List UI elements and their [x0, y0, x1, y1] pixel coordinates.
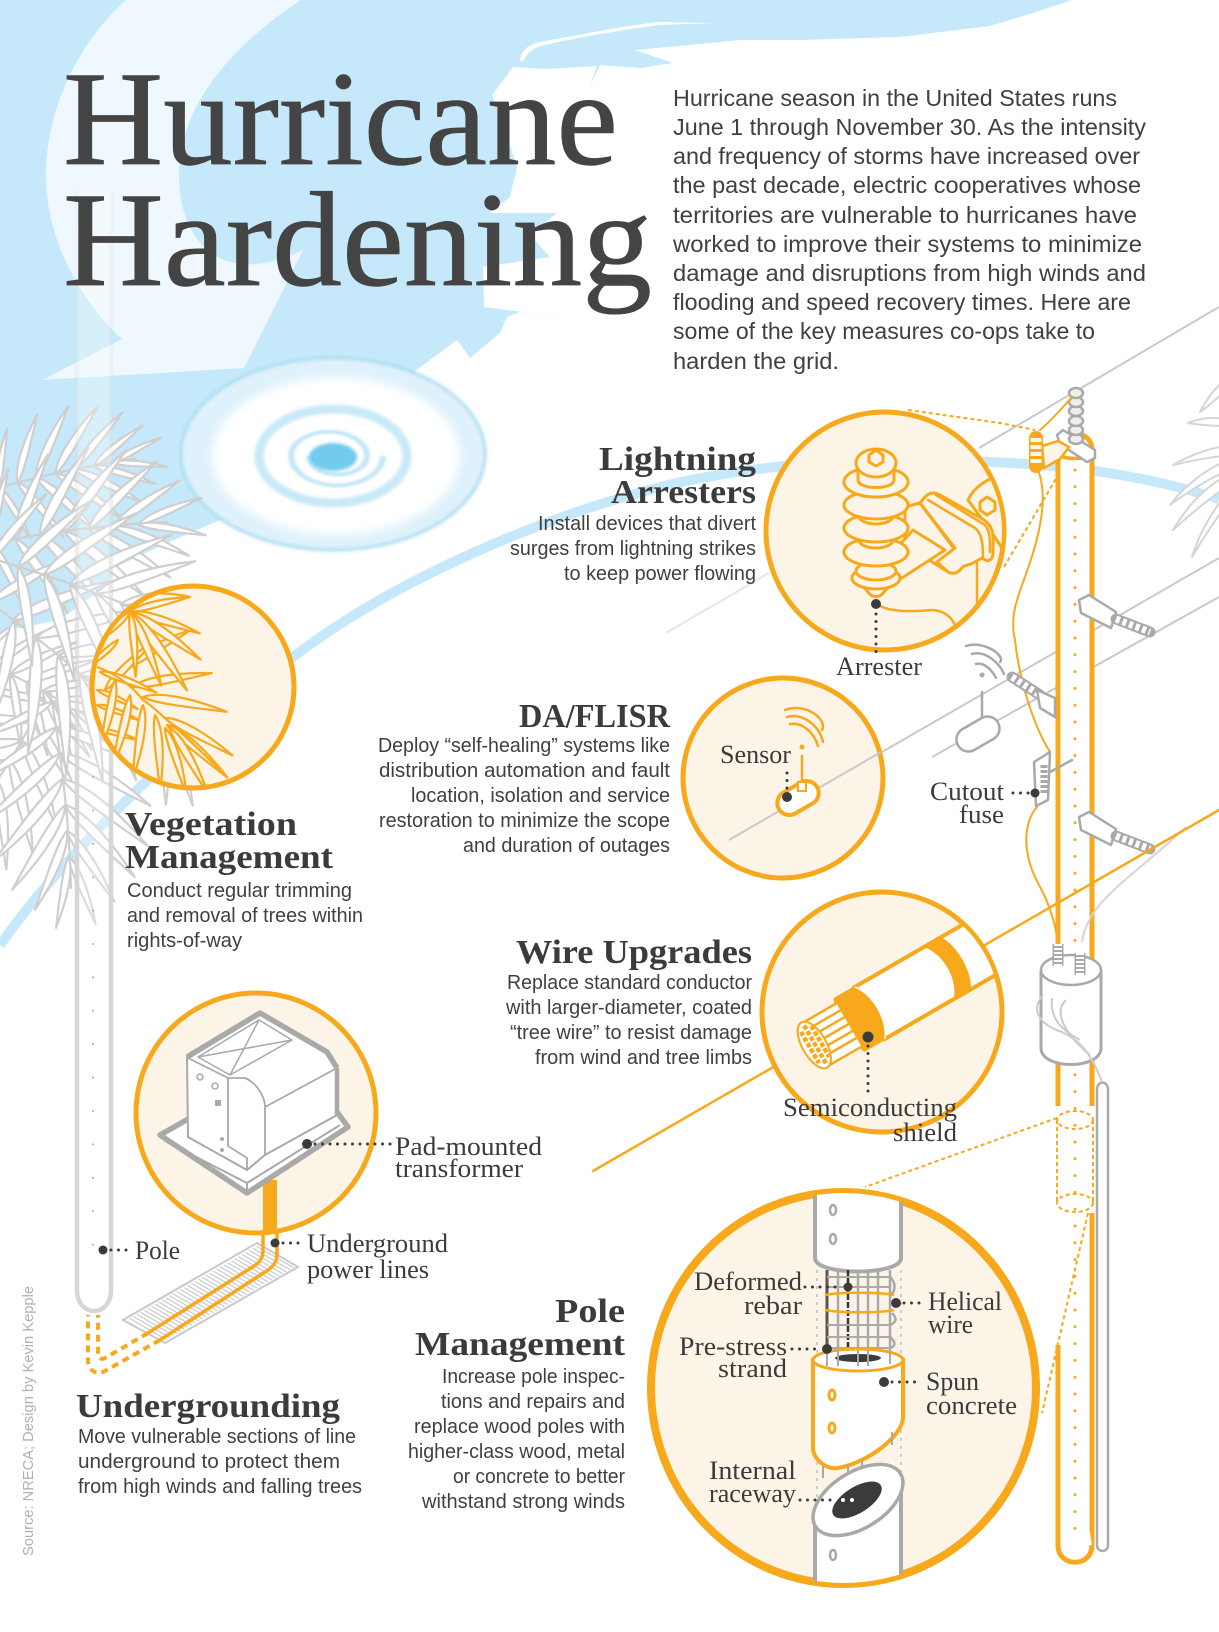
grey line sensor [952, 645, 1004, 756]
heading: Management [415, 1326, 626, 1363]
label: arrester: Arrester [836, 652, 922, 681]
intro text block: worked to improve their systems to minimize [672, 231, 1142, 257]
body text [78, 1425, 362, 1498]
background: blue map of the ocean and coastline [0, 0, 1072, 632]
label: pole: Pole [135, 1236, 180, 1265]
label: semiconducting shield: shield [893, 1118, 957, 1147]
heading [415, 1293, 626, 1363]
capacitor bank [1037, 827, 1186, 1082]
label: deformed rebar: rebar [744, 1291, 802, 1320]
grey ground wire [1097, 1082, 1108, 1551]
label: underground power lines [270, 1229, 448, 1284]
underground conduit [88, 1180, 277, 1373]
body text: surges from lightning strikes [510, 537, 756, 560]
body text: or concrete to better [453, 1465, 625, 1488]
heading: Management [125, 839, 334, 876]
circle [136, 993, 376, 1233]
body text: Replace standard conductor [507, 971, 752, 994]
circle [762, 892, 1002, 1132]
cutout fuse [1034, 752, 1072, 806]
label: underground power lines: Underground [307, 1229, 448, 1258]
label: pole [98, 1236, 180, 1265]
label: semiconducting shield [783, 1032, 957, 1147]
body text: withstand strong winds [421, 1490, 625, 1513]
intro text block: and frequency of storms have increased over [673, 143, 1140, 169]
intro text block: harden the grid. [673, 348, 839, 374]
transformer illustration [160, 1013, 348, 1193]
body text: rights-of-way [127, 929, 243, 952]
body text: Conduct regular trimming [127, 879, 352, 902]
label: deformed rebar [694, 1267, 852, 1320]
label: internal raceway: Internal [709, 1456, 796, 1485]
body text [378, 734, 670, 857]
body text [127, 879, 363, 952]
label: spun concrete: concrete [926, 1391, 1017, 1420]
grey power lines [666, 307, 1219, 840]
label: internal raceway [709, 1456, 854, 1508]
intro text block [672, 85, 1146, 374]
label: internal raceway: raceway [709, 1479, 796, 1508]
body text: tions and repairs and [441, 1390, 625, 1413]
arrester illustration [844, 449, 1010, 625]
label: helical wire: Helical [928, 1287, 1002, 1316]
label: pre-stress strand: strand [718, 1354, 787, 1383]
orange main wire line [593, 810, 1219, 1171]
crossarm with insulator upper right [1079, 595, 1150, 632]
body text: Increase pole inspec- [442, 1365, 625, 1388]
label: cutout fuse [930, 777, 1040, 829]
heading [599, 441, 756, 511]
top insulator string [1057, 388, 1095, 462]
label: semiconducting shield: Semiconducting [783, 1093, 957, 1122]
palm tree fronds [0, 385, 249, 936]
label: cutout fuse: Cutout [930, 777, 1005, 806]
right palm fronds [1170, 380, 1219, 557]
left grey pole [77, 191, 111, 1311]
body text: from high winds and falling trees [78, 1475, 362, 1498]
circle [766, 412, 1004, 650]
body text: and removal of trees within [127, 904, 363, 927]
pole shaft [1058, 434, 1092, 1562]
label: underground power lines: power lines [307, 1255, 429, 1284]
panel: undergrounding [76, 993, 542, 1498]
small arrester on pole [1036, 438, 1069, 468]
body text [408, 1365, 625, 1513]
body text: restoration to minimize the scope [379, 809, 670, 832]
body text: Deploy “self-healing” systems like [378, 734, 670, 757]
heading: Vegetation [125, 806, 297, 843]
body text: with larger-diameter, coated [505, 996, 752, 1019]
title [63, 45, 652, 315]
body text: higher-class wood, metal [408, 1440, 625, 1463]
crossarm with insulator lower right [1079, 812, 1150, 849]
title: Hurricane [63, 45, 618, 194]
body text: replace wood poles with [414, 1415, 625, 1438]
label: pre-stress strand: Pre-stress [679, 1332, 787, 1361]
label: sensor: Sensor [720, 740, 791, 769]
label: helical wire [891, 1287, 1002, 1339]
body text: location, isolation and service [411, 784, 670, 807]
orange jumper wire [1013, 397, 1072, 945]
intro text block: territories are vulnerable to hurricanes have [673, 202, 1137, 228]
circle with palm [79, 586, 294, 795]
heading: Wire Upgrades [516, 934, 752, 971]
heading: Pole [555, 1293, 625, 1330]
circle [651, 1192, 1036, 1584]
sensor illustration [729, 708, 881, 840]
label: arrester [836, 599, 922, 681]
blue arc storm track [0, 460, 1219, 945]
cable cross-section illustration [796, 924, 994, 1070]
label: sensor [720, 740, 792, 802]
label: pad-mounted transformer [302, 1132, 542, 1183]
intro text block: June 1 through November 30. As the intensity [673, 114, 1146, 140]
intro text block: the past decade, electric cooperatives whose [673, 172, 1141, 198]
label: pad-mounted transformer: Pad-mounted [395, 1132, 542, 1161]
body text [510, 512, 756, 585]
label: pre-stress strand [679, 1332, 832, 1383]
intro text block: flooding and speed recovery times. Here are [673, 289, 1131, 315]
hurricane swirl band [42, 0, 303, 380]
body text: from wind and tree limbs [535, 1046, 752, 1069]
body text: Move vulnerable sections of line [78, 1425, 356, 1448]
panel: vegetation management [79, 586, 363, 952]
heading: Arresters [611, 474, 756, 511]
panel: wire upgrades [506, 890, 1004, 1142]
label: spun concrete [879, 1367, 1017, 1420]
body text [505, 971, 752, 1069]
hurricane vortex [181, 358, 485, 550]
source credit: Source: NRECA; Design by Kevin Kepple [20, 1286, 37, 1556]
pole cross-section illustration [811, 1193, 905, 1583]
label: helical wire: wire [928, 1310, 973, 1339]
heading: DA/FLISR [519, 698, 670, 735]
intro text block: some of the key measures co-ops take to [673, 318, 1095, 344]
intro text block: Hurricane season in the United States runs [673, 85, 1117, 111]
label: pad-mounted transformer: transformer [395, 1154, 523, 1183]
body text: underground to protect them [78, 1450, 340, 1473]
body text: and duration of outages [463, 834, 670, 857]
utility pole with equipment [865, 388, 1186, 1562]
hatched trench grate [120, 1240, 300, 1345]
circle [683, 678, 883, 878]
title: Hardening [63, 166, 652, 315]
body text: “tree wire” to resist damage [510, 1021, 752, 1044]
heading: Undergrounding [76, 1388, 340, 1425]
body text: distribution automation and fault [379, 759, 670, 782]
label: deformed rebar: Deformed [694, 1267, 802, 1296]
crossarm with insulator left [1012, 677, 1055, 717]
body text: Install devices that divert [538, 512, 756, 535]
intro text block: damage and disruptions from high winds and [673, 260, 1146, 286]
panel: pole management [408, 1185, 1036, 1600]
label: spun concrete: Spun [926, 1367, 979, 1396]
panel: lightning arresters [510, 412, 1010, 681]
white barrier island sliver [520, 22, 713, 62]
body text: to keep power flowing [564, 562, 756, 585]
panel: DA/FLISR [378, 678, 883, 878]
label: cutout fuse: fuse [959, 800, 1004, 829]
dashed cutaway section [865, 410, 1093, 1413]
heading: Lightning [599, 441, 756, 478]
heading [125, 806, 334, 876]
